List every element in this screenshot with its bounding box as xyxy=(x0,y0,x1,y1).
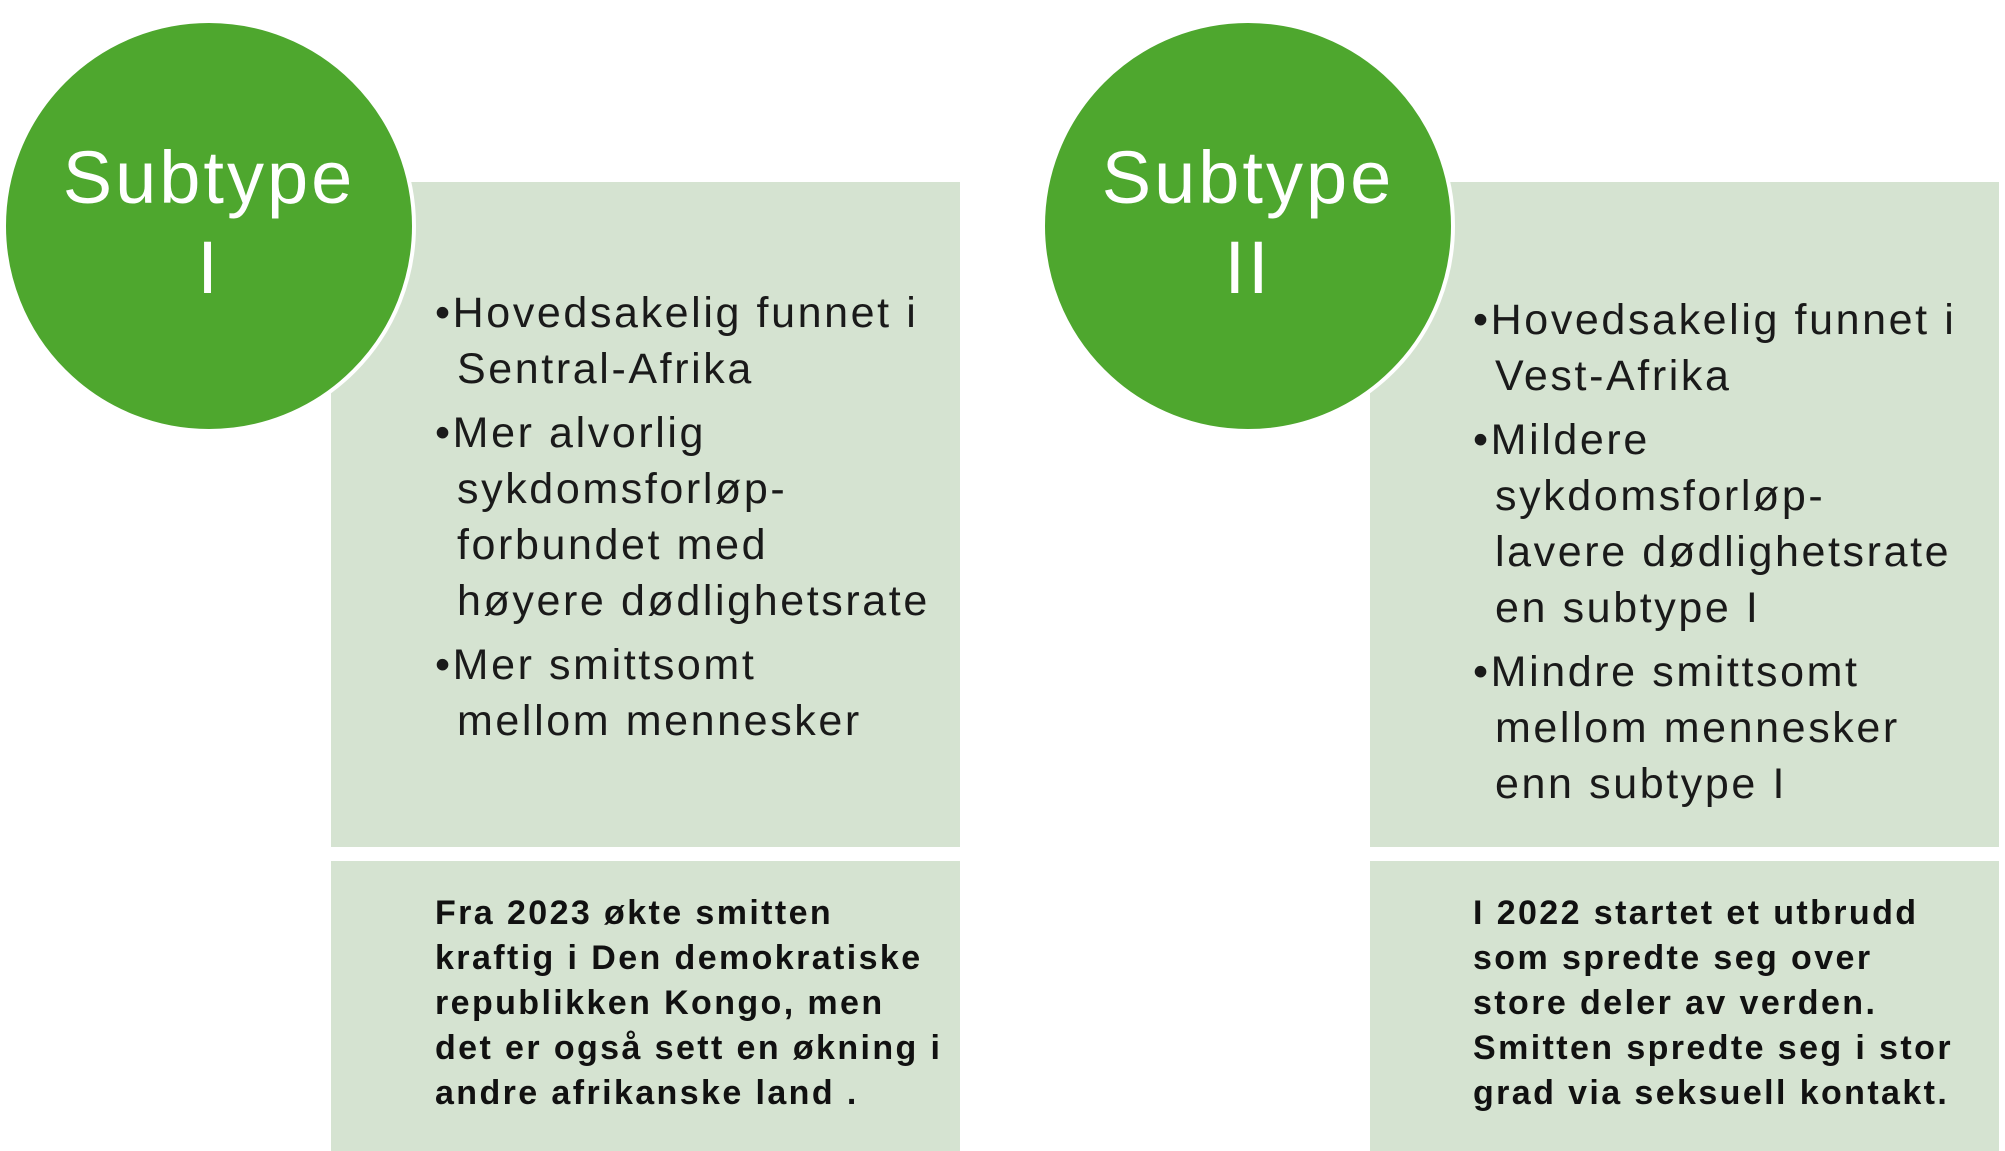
text: subtype II note: store deler av verden. xyxy=(1473,984,1877,1022)
circle: Subtype II: II xyxy=(1224,226,1272,309)
text: subtype II bullets xyxy=(1473,296,1956,808)
text: subtype I bullets: •Mer smittsomt xyxy=(435,641,756,689)
circle: Subtype I: Subtype xyxy=(63,136,355,219)
text: subtype II bullets: mellom mennesker xyxy=(1495,704,1900,752)
text: subtype II bullets: en subtype I xyxy=(1495,584,1760,632)
text: subtype I note: det er også sett en økning i xyxy=(435,1029,942,1067)
text: subtype II bullets: •Mindre smittsomt xyxy=(1473,648,1860,696)
panel: subtype I details xyxy=(331,182,960,847)
text: subtype II bullets: enn subtype I xyxy=(1495,760,1787,808)
text: subtype I bullets: sykdomsforløp- xyxy=(457,465,787,513)
panel: subtype I note xyxy=(331,861,960,1151)
text: subtype I bullets xyxy=(435,289,930,745)
circle: Subtype II xyxy=(1041,19,1455,433)
text: subtype II note: Smitten spredte seg i stor xyxy=(1473,1029,1953,1067)
text: subtype II bullets: •Mildere xyxy=(1473,416,1650,464)
circle: Subtype I: I xyxy=(197,226,221,309)
text: subtype I bullets: Sentral-Afrika xyxy=(457,345,754,393)
text: subtype II note: I 2022 startet et utbrudd xyxy=(1473,894,1918,932)
text: subtype I note: republikken Kongo, men xyxy=(435,984,885,1022)
text: subtype II bullets: sykdomsforløp- xyxy=(1495,472,1825,520)
circle: Subtype II: Subtype xyxy=(1102,136,1394,219)
text: subtype I bullets: høyere dødlighetsrate xyxy=(457,577,930,625)
text: subtype II note: grad via seksuell kontakt. xyxy=(1473,1074,1949,1112)
text: subtype II note: som spredte seg over xyxy=(1473,939,1872,977)
text: subtype I note xyxy=(435,894,942,1112)
panel: subtype II note xyxy=(1370,861,1999,1151)
text: subtype II bullets: lavere dødlighetsrate xyxy=(1495,528,1951,576)
text: subtype II bullets: •Hovedsakelig funnet i xyxy=(1473,296,1956,344)
text: subtype I note: Fra 2023 økte smitten xyxy=(435,894,833,932)
text: subtype I bullets: forbundet med xyxy=(457,521,768,569)
text: subtype I bullets: mellom mennesker xyxy=(457,697,862,745)
text: subtype I note: kraftig i Den demokratiske xyxy=(435,939,923,977)
text: subtype I bullets: •Hovedsakelig funnet i xyxy=(435,289,918,337)
text: subtype I bullets: •Mer alvorlig xyxy=(435,409,706,457)
text: subtype I note: andre afrikanske land . xyxy=(435,1074,859,1112)
circle: Subtype I xyxy=(2,19,416,433)
panel: subtype II details xyxy=(1370,182,1999,847)
text: subtype II note xyxy=(1473,894,1953,1112)
text: subtype II bullets: Vest-Afrika xyxy=(1495,352,1732,400)
